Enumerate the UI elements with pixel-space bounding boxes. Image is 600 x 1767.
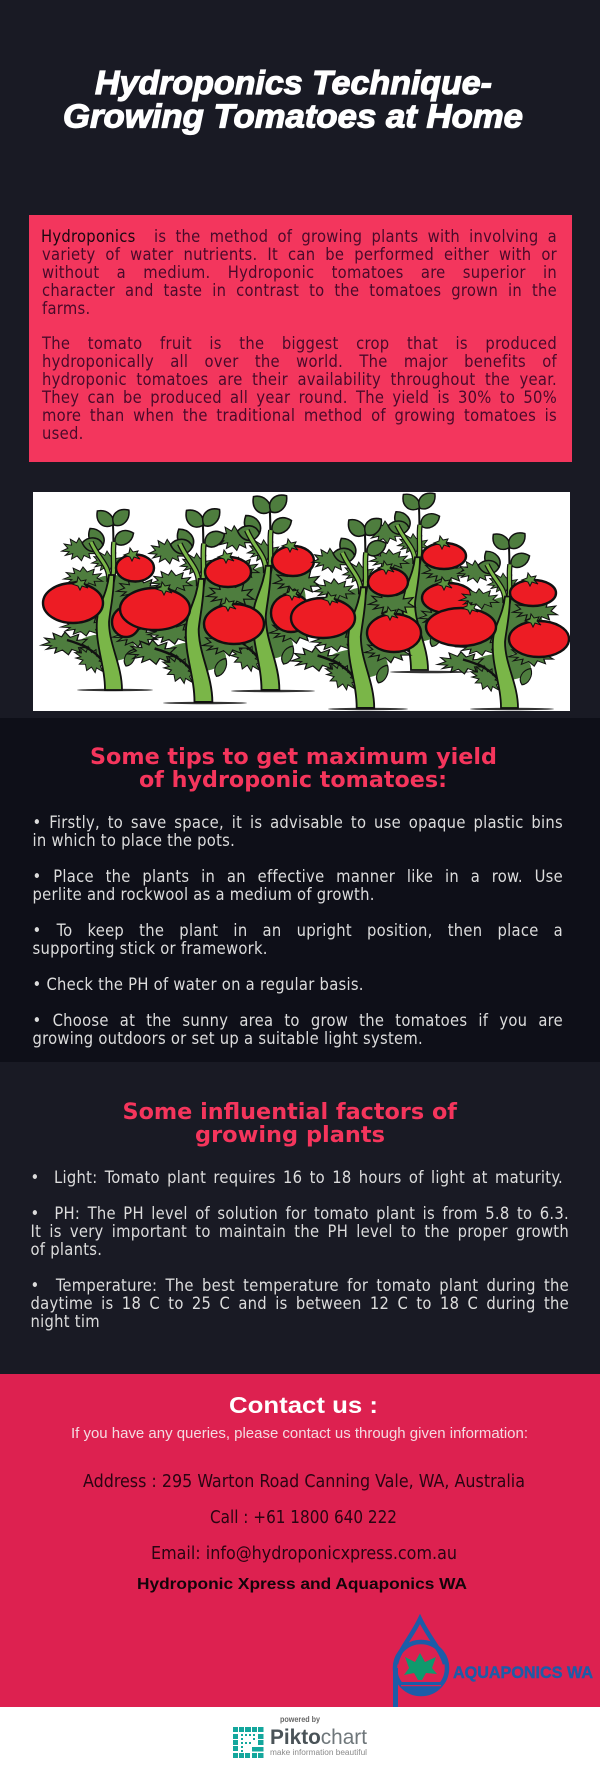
tip: placement: • Place the plants in an effective manner like in a row. Use	[32, 867, 563, 886]
tip: support: • To keep the plant in an upright position, then place a	[32, 921, 563, 940]
text block: tomato benefits: hydroponically all over the world. The major benefits of	[42, 352, 557, 371]
text block: tomato benefits: more than when the traditional method of growing tomatoes is	[42, 406, 557, 425]
heading: factors	[122, 1100, 458, 1148]
heading: tips: Some tips to get maximum yield	[90, 745, 497, 770]
email: Email: info@hydroponicxpress.com.au	[151, 1544, 457, 1564]
panel: tips	[0, 718, 600, 1062]
list: tips	[32, 813, 563, 1048]
illustration: row of tomato plants	[33, 492, 570, 711]
text block: tomato benefits: hydroponic tomatoes are their availability throughout the year.	[42, 370, 557, 389]
heading: factors: Some influential factors of	[122, 1100, 457, 1125]
company name: Hydroponic Xpress and Aquaponics WA	[137, 1576, 467, 1593]
title	[63, 65, 523, 136]
title: Growing Tomatoes at Home	[63, 99, 523, 136]
text block: tomato benefits: The tomato fruit is the biggest crop that is produced	[42, 334, 557, 353]
factor: PH: • PH: The PH level of solution for tomato plant is from 5.8 to 6.3.	[30, 1204, 569, 1223]
tip: bins: • Firstly, to save space, it is advisable to use opaque plastic bins	[32, 813, 563, 832]
wordmark: Piktochart	[270, 1726, 367, 1749]
tip: light	[32, 1011, 563, 1048]
logo: Aquaponics WA: AQUAPONICS WA	[453, 1663, 593, 1682]
text block: tomato benefits: used.	[42, 424, 84, 443]
factor: PH: of plants.	[30, 1240, 102, 1259]
plant: back right	[347, 489, 474, 670]
factor: temperature: daytime is 18 C to 25 C and is between 12 C to 18 C during the	[30, 1294, 569, 1313]
logo: Aquaponics WA	[392, 1614, 593, 1707]
heading: contact us: Contact us :	[229, 1392, 378, 1418]
tip: bins: in which to place the pots.	[32, 831, 235, 850]
powered by: powered by	[280, 1715, 320, 1724]
panel: introduction	[29, 215, 572, 462]
footer: powered by Piktochart	[0, 1707, 600, 1767]
plant: front 2	[120, 504, 264, 702]
text block: what hydroponics is: farms.	[42, 299, 90, 318]
factor: temperature: • Temperature: The best temperature for tomato plant during the	[30, 1276, 569, 1295]
icon: Piktochart mark	[233, 1727, 264, 1758]
tip: placement	[32, 867, 563, 904]
list: factors	[30, 1168, 569, 1331]
tip: placement: perlite and rockwool as a medium of growth.	[32, 885, 375, 904]
factor: PH	[30, 1204, 569, 1259]
text block: what hydroponics is: variety of water nutrients. It can be performed either with or	[42, 245, 557, 264]
text block: what hydroponics is: without a medium. Hydroponic tomatoes are superior in	[42, 263, 557, 282]
tip: light: growing outdoors or set up a suitable light system.	[32, 1029, 423, 1048]
plant: back left	[195, 490, 323, 690]
address: Address : 295 Warton Road Canning Vale, WA, Australia	[83, 1472, 525, 1492]
contact text	[71, 1392, 528, 1593]
heading: factors: growing plants	[195, 1123, 385, 1148]
title: Hydroponics Technique-	[95, 65, 492, 102]
factor: temperature: night tim	[30, 1312, 100, 1331]
factor: PH: It is very important to maintain the PH level to the proper growth	[30, 1222, 569, 1241]
plant: front 3	[291, 514, 421, 708]
text block: tomato benefits: They can be produced all year round. The yield is 30% to 50%	[42, 388, 557, 407]
tip: light: • Choose at the sunny area to grow the tomatoes if you are	[32, 1011, 563, 1030]
text block: what hydroponics is	[41, 227, 557, 318]
contact intro: If you have any queries, please contact us through given information:	[71, 1426, 528, 1442]
phone: Call : +61 1800 640 222	[210, 1508, 397, 1528]
text block: what hydroponics is: character and taste in contrast to the tomatoes grown in the	[42, 281, 557, 300]
tip: support: supporting stick or framework.	[32, 939, 268, 958]
text block: tomato benefits	[42, 334, 557, 443]
plant: front 1	[41, 505, 163, 690]
image background	[33, 492, 570, 711]
heading: tips: of hydroponic tomatoes:	[139, 768, 447, 793]
factor: light: • Light: Tomato plant requires 16 to 18 hours of light at maturity.	[30, 1168, 563, 1187]
heading: tips	[90, 745, 497, 793]
factor: temperature	[30, 1276, 569, 1331]
plant: front 4	[426, 528, 569, 708]
ground shadows	[77, 671, 554, 710]
tip: support	[32, 921, 563, 958]
tip: bins	[32, 813, 563, 850]
tip: PH: • Check the PH of water on a regular basis.	[32, 975, 364, 994]
tagline: make information beautiful	[270, 1748, 367, 1757]
panel: contact	[0, 1374, 600, 1707]
text block: what hydroponics is: Hydroponics is the method of growing plants with involving a	[41, 227, 557, 246]
panel: influential factors	[0, 1062, 600, 1374]
